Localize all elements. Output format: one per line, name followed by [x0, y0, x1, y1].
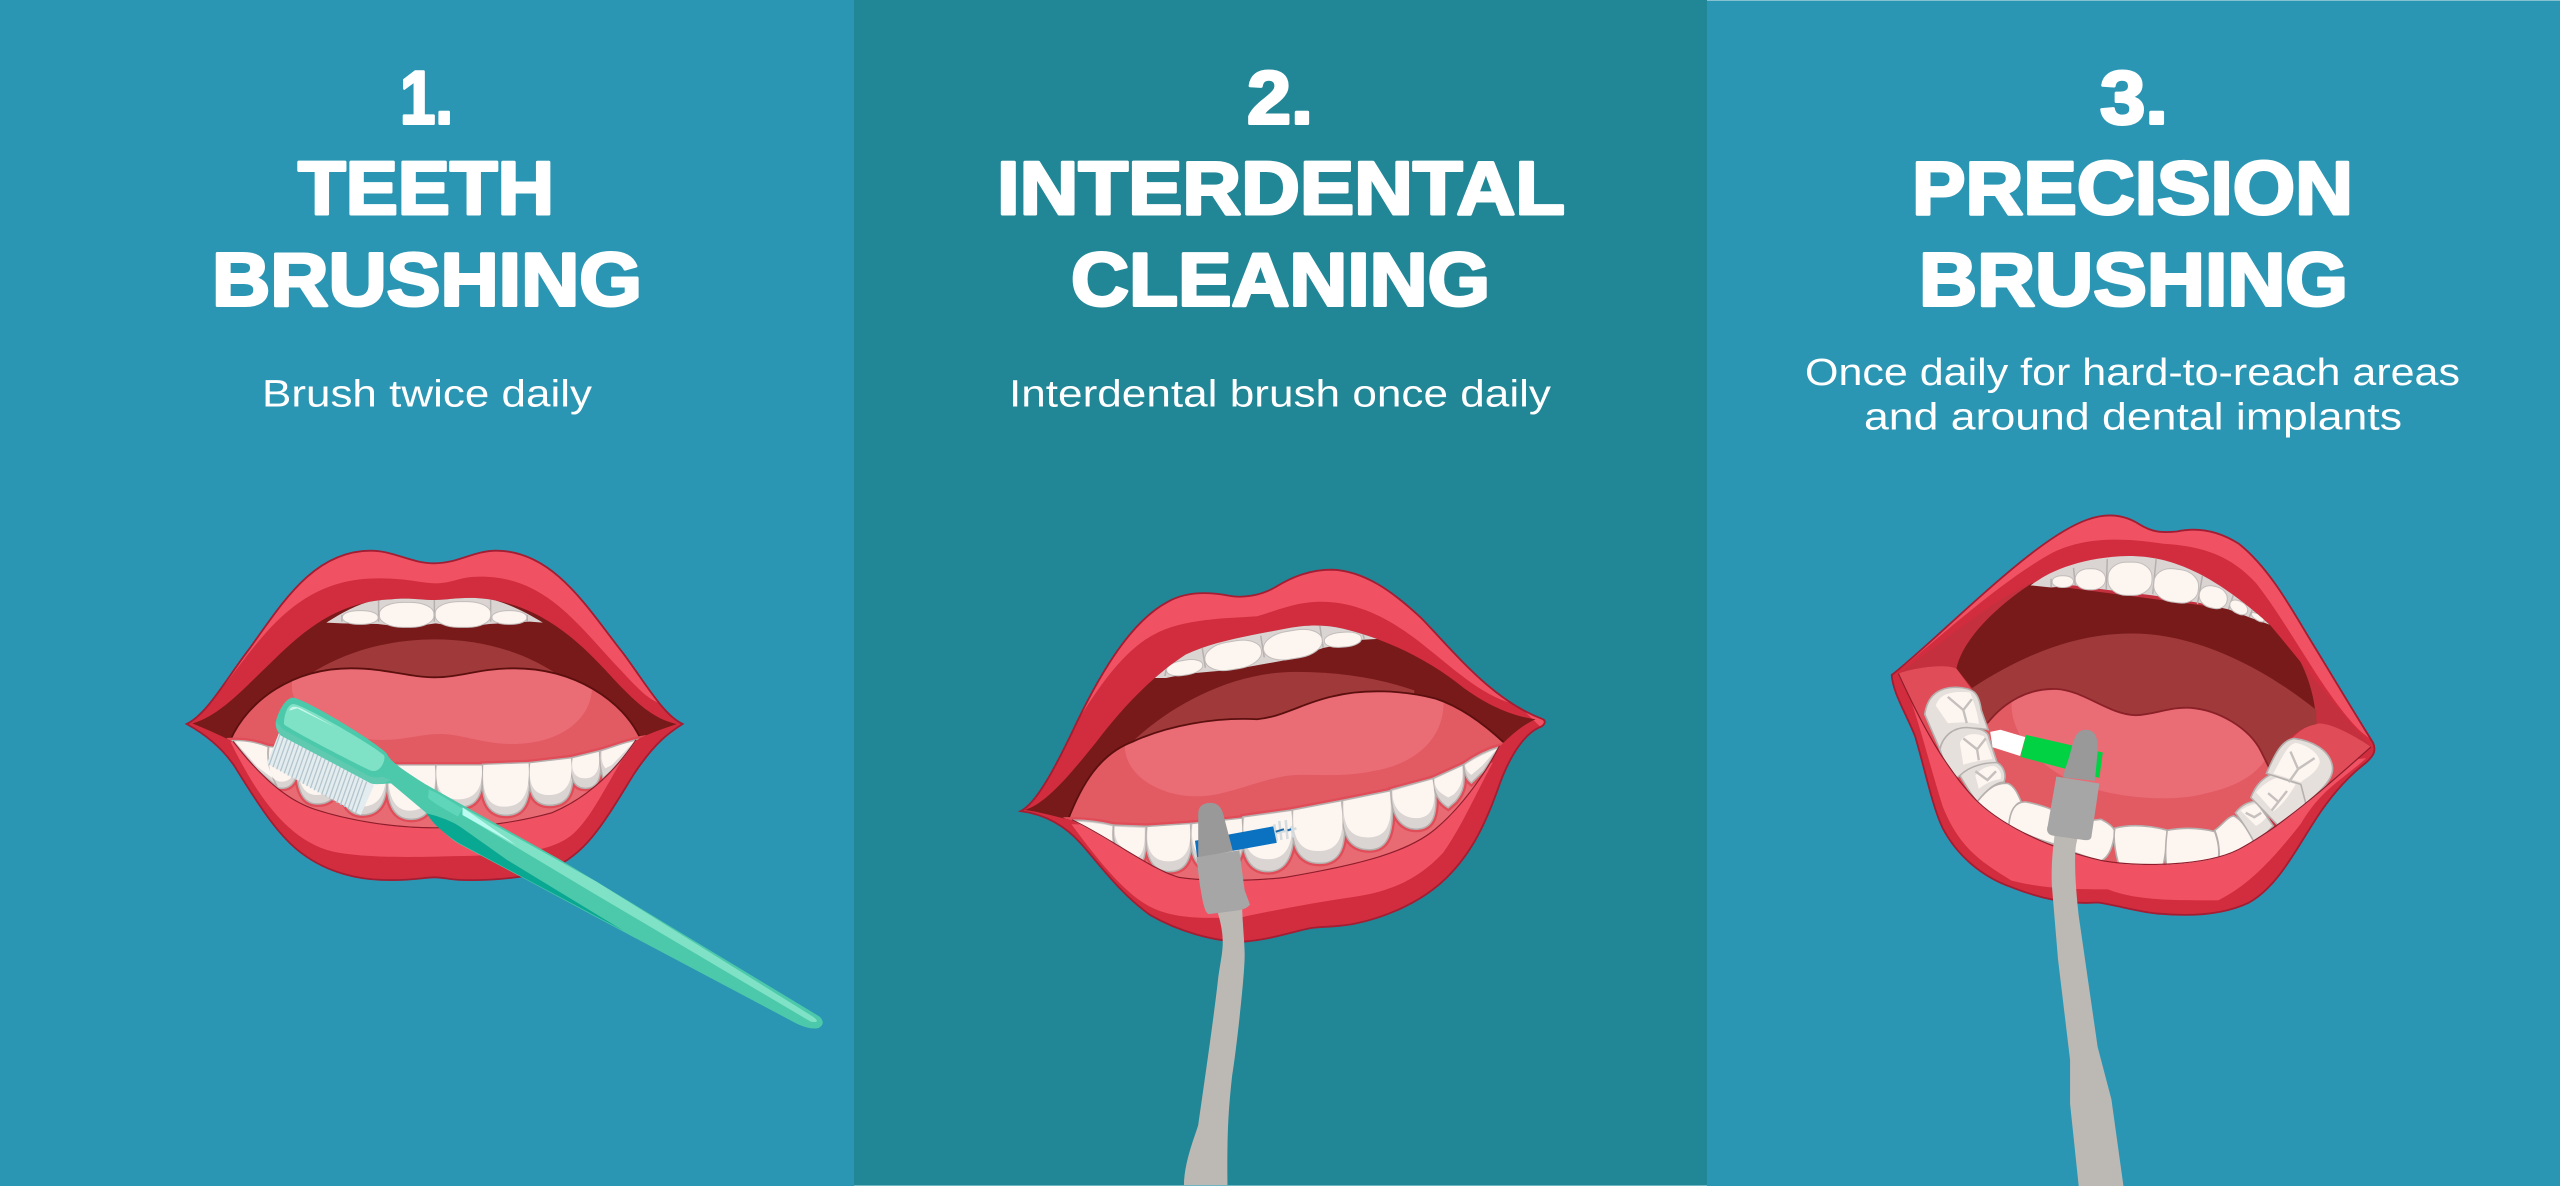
lips [184, 550, 684, 881]
text: once daily for hard-to-reach areas [1805, 352, 2460, 438]
heading: step 1: TEETH [298, 146, 554, 230]
brush bristles [1274, 820, 1296, 841]
text: interdental brush once daily: Interdental brush once daily [1009, 374, 1551, 416]
white brush tip [1990, 730, 2025, 756]
text: once daily for hard-to-reach areas: Once daily for hard-to-reach areas [1805, 352, 2460, 394]
brush collar [1196, 850, 1250, 914]
heading: step 1: BRUSHING [212, 238, 642, 322]
upper teeth [326, 596, 543, 627]
brush cap [1198, 803, 1233, 858]
lower teeth and molars [1925, 687, 2333, 866]
lips [1018, 568, 1546, 942]
top edge line [1707, 0, 2560, 1]
heading: step 3: BRUSHING [1919, 238, 2348, 322]
lips [1890, 514, 2376, 916]
panel background [0, 0, 854, 1186]
icon: toothbrush [267, 698, 823, 1028]
heading: step 2: CLEANING [1071, 238, 1490, 322]
mouth interior [1898, 556, 2372, 865]
upper teeth [2030, 555, 2270, 625]
lower teeth [1073, 747, 1499, 872]
mouth interior [192, 598, 676, 828]
toothbrush head [276, 698, 429, 813]
heading: step 3: 3. [2100, 56, 2168, 140]
panel: teeth brushing [184, 70, 823, 1028]
heading: step 2: INTERDENTAL [997, 146, 1565, 230]
toothbrush handle [400, 773, 823, 1028]
icon: precision brush [1990, 730, 2123, 1186]
brush handle [1184, 909, 1245, 1186]
heading: step 2: 2. [1247, 56, 1313, 140]
icon: interdental brush [1184, 803, 1296, 1186]
illustration: wide open mouth with precision brush [1890, 514, 2376, 1186]
brush handle [2052, 835, 2123, 1186]
panel: precision brushing [1707, 0, 2560, 1186]
text: once daily for hard-to-reach areas: and around dental implants [1864, 396, 2402, 438]
toothbrush bristles [267, 732, 374, 815]
illustration: open mouth with toothbrush [184, 550, 823, 1028]
mouth interior [1025, 626, 1536, 881]
lower teeth [233, 739, 639, 819]
text: brush twice daily: Brush twice daily [262, 374, 592, 416]
brush cap [2063, 730, 2098, 781]
bottom edge line [854, 1185, 1707, 1186]
heading: step 2 [997, 56, 1565, 322]
heading: step 1: 1. [400, 56, 453, 140]
heading: step 1 [212, 56, 642, 322]
illustration: open mouth with interdental brush [1000, 540, 1560, 1186]
heading: step 3: PRECISION [1912, 146, 2353, 230]
green sleeve [2020, 735, 2103, 778]
panel: interdental cleaning [854, 0, 1707, 1186]
blue wire sleeve [1195, 826, 1277, 857]
panel background [854, 0, 1707, 1186]
brush collar [2047, 776, 2099, 840]
heading: step 3 [1912, 56, 2353, 322]
panel background [1707, 0, 2560, 1186]
upper teeth [1148, 622, 1379, 678]
